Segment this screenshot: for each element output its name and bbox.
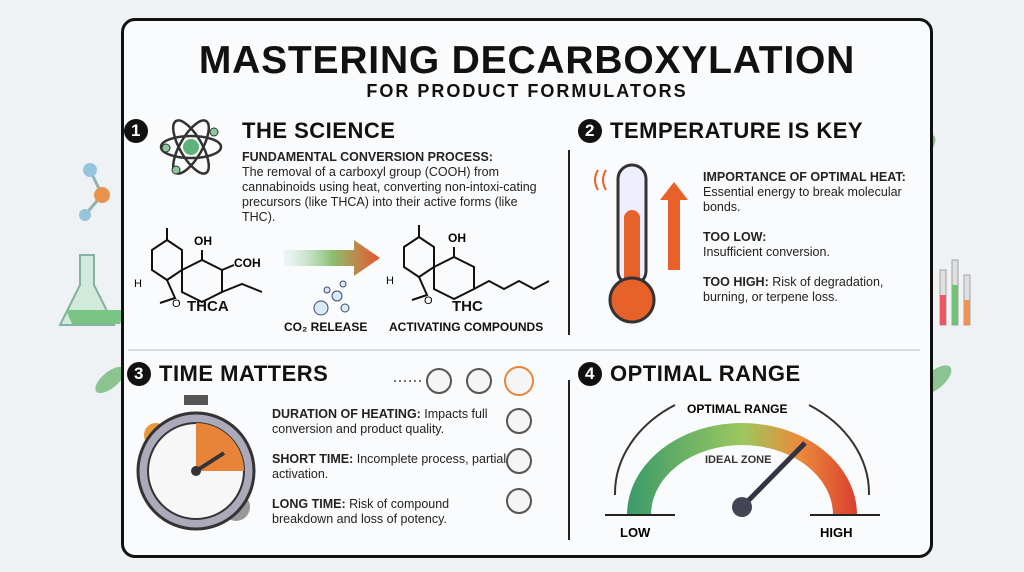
text: conversion process: FUNDAMENTAL CONVERSION PROCESS:: [242, 150, 493, 164]
molecule THCA: H: [134, 278, 142, 290]
gauge: [605, 402, 880, 540]
heading 4: OPTIMAL RANGE: [610, 361, 801, 386]
clocks row: [394, 366, 534, 514]
icon: stopwatch: [136, 395, 256, 530]
text: temperature: TOO HIGH: Risk of degradation, burning, or terpene loss.: [703, 275, 883, 304]
heading 1: 1: [131, 121, 141, 140]
text: temperature: Insufficient conversion.: [703, 245, 830, 259]
panel 2: temperature: [578, 118, 906, 324]
heading 3: TIME MATTERS: [159, 361, 328, 386]
text: time: [272, 407, 506, 526]
panel 1: science: THE SCIENCE: [242, 118, 395, 143]
gauge: OPTIMAL RANGE: [687, 402, 787, 416]
icon: bubbles: [314, 280, 350, 316]
heading 2: 2: [585, 121, 595, 140]
label CO2: CO₂ RELEASE: [284, 320, 367, 334]
panel 4: optimal range: [578, 361, 880, 540]
text: time: LONG TIME: Risk of compound breakdown and loss of potency.: [272, 497, 449, 526]
molecule THCA: [134, 228, 262, 310]
molecule THC: OH: [448, 231, 466, 245]
gauge: HIGH: [820, 525, 852, 540]
label THC: THC: [452, 298, 483, 315]
text: time: SHORT TIME: Incomplete process, partial activation.: [272, 452, 506, 481]
text: time: DURATION OF HEATING: Impacts full conversion and product quality.: [272, 407, 488, 436]
molecule THCA: O: [172, 298, 181, 310]
subtitle: FOR PRODUCT FORMULATORS: [366, 81, 688, 101]
icon: atom: [160, 119, 222, 175]
title: MASTERING DECARBOXYLATION: [199, 39, 855, 82]
gauge: LOW: [620, 525, 651, 540]
icon: thermometer: [594, 164, 688, 324]
label THCA: THCA: [187, 298, 229, 315]
text: temperature: IMPORTANCE OF OPTIMAL HEAT: Essential energy to break molecular bonds.: [703, 170, 906, 214]
molecule THC: [386, 225, 550, 307]
text: temperature: TOO LOW:: [703, 230, 766, 244]
molecule THCA: OH: [194, 234, 212, 248]
arrow: [284, 240, 380, 276]
text: temperature: [703, 170, 906, 304]
gauge: IDEAL ZONE: [705, 454, 771, 466]
panel 3: time: [127, 361, 534, 530]
heading 2: TEMPERATURE IS KEY: [610, 118, 863, 143]
molecule THC: O: [424, 295, 433, 307]
molecule THC: H: [386, 275, 394, 287]
label activating: ACTIVATING COMPOUNDS: [389, 320, 543, 334]
text: conversion process: The removal of a carboxyl group (COOH) from cannabinoids using heat, converting non-intoxi-cating precursors (like THCA) into their active forms (like THC).: [242, 165, 537, 224]
heading 4: 4: [585, 364, 595, 383]
main panel: [121, 18, 933, 558]
heading 3: 3: [134, 364, 144, 383]
panel 1: science: [124, 118, 550, 334]
molecule THCA: COH: [234, 256, 261, 270]
